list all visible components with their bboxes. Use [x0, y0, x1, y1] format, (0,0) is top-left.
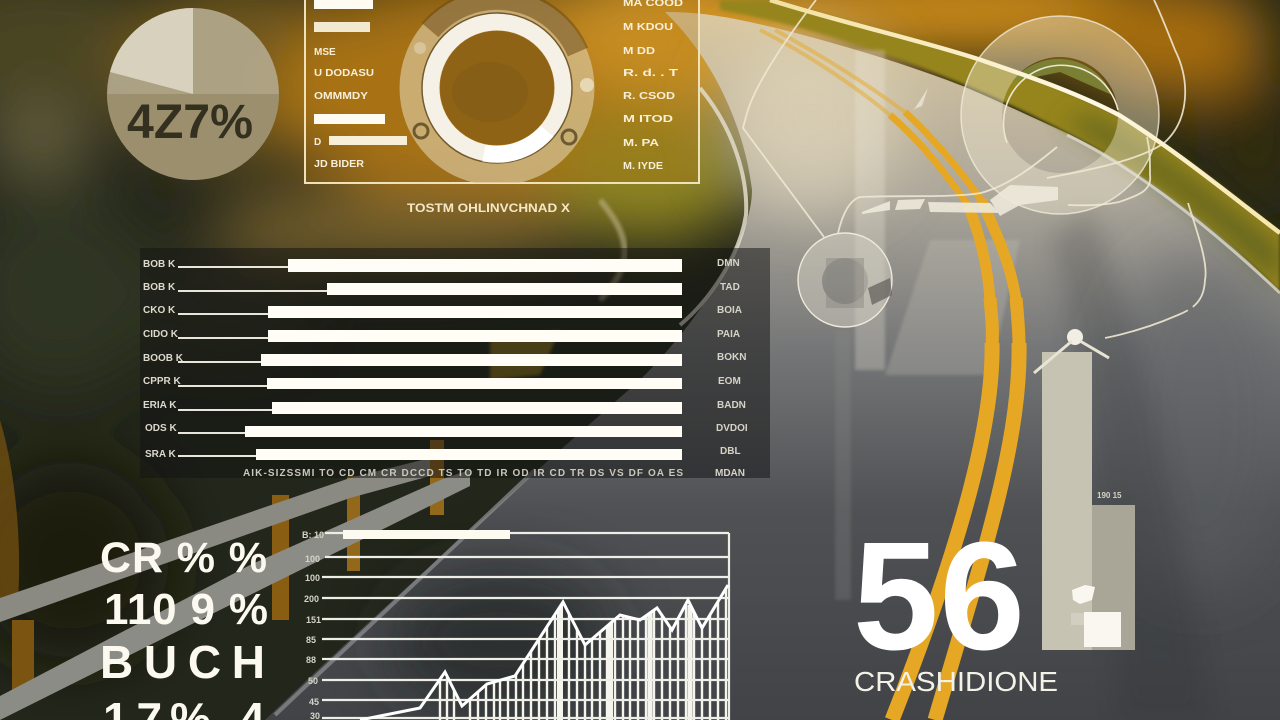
axis labels: B: 10: [302, 530, 324, 540]
arrow head: [1034, 329, 1109, 373]
axis labels: 151: [306, 615, 321, 625]
column chart with arrow: [1034, 329, 1135, 650]
right bar labels: DBL: [720, 446, 741, 457]
left labels: [314, 0, 407, 170]
stat text list: 110 9 %: [104, 585, 268, 634]
right bar labels: DVDOI: [716, 423, 748, 434]
right labels: M ITOD: [623, 114, 673, 125]
right bar labels: [715, 258, 748, 479]
road segment callout strip: [862, 185, 1058, 216]
left labels: OMMMDY: [314, 91, 368, 102]
right bar labels: DMN: [717, 258, 740, 269]
left bar labels: ODS K: [145, 423, 177, 434]
trend line: [360, 585, 728, 720]
yellow marks behind bars: [490, 330, 560, 380]
left bar labels: CIDO K: [143, 329, 179, 340]
axis labels: [302, 530, 324, 720]
radial chart caption: TOSTM OHLINVCHNAD X: [407, 201, 570, 215]
guardrail streak: [770, 0, 1280, 233]
column value: 190 15: [1097, 491, 1122, 500]
left bar labels: [143, 259, 184, 460]
stat text list: CR % %: [100, 534, 267, 582]
right bar labels: BADN: [717, 400, 746, 411]
left bar labels: ERIA K: [143, 400, 177, 411]
grassy verge on right: [720, 0, 1280, 293]
right labels: M. IYDE: [623, 161, 663, 172]
pie highlight wedge: [110, 8, 193, 94]
guardrail bottom left: [0, 420, 470, 720]
right bar labels: BOKN: [717, 352, 746, 363]
stat text list: [100, 534, 268, 720]
right labels: [623, 0, 683, 172]
right bar labels: TAD: [720, 282, 740, 293]
hatched area under line: [440, 580, 726, 720]
right bar labels: EOM: [718, 376, 741, 387]
left labels: JD BIDER: [314, 159, 365, 170]
right labels: R. CSOD: [623, 91, 675, 102]
axis labels: 45: [309, 697, 319, 707]
bar axis labels: AIK-SIZSSMI TO CD CM CR DCCD TS TO TD IR OD IR CD TR DS VS DF OA ES: [243, 468, 683, 479]
left bar labels: CPPR K: [143, 376, 182, 387]
big number caption: CRASHIDIONE: [854, 666, 1058, 697]
left bar labels: BOB K: [143, 282, 176, 293]
axis labels: 50: [308, 676, 318, 686]
right labels: M. PA: [623, 138, 659, 149]
radial chart: [412, 0, 594, 173]
axis labels: 100: [305, 554, 320, 564]
left bar labels: BOOB K: [143, 353, 184, 364]
big ring chart top right: [961, 16, 1159, 214]
small donut chart: [798, 233, 892, 327]
pie chart top left: [107, 8, 279, 180]
column icons: [1071, 585, 1121, 647]
yellow double road lines: [760, 30, 1019, 720]
right labels: R. d. . T: [623, 68, 678, 79]
chart header bar: [343, 530, 510, 539]
right bar labels: BOIA: [717, 305, 742, 316]
axis labels: 100: [305, 573, 320, 583]
left labels: U DODASU: [314, 68, 374, 79]
left labels: MSE: [314, 47, 336, 58]
right bar labels: PAIA: [717, 329, 740, 340]
right labels: M KDOU: [623, 22, 673, 33]
left bar labels: BOB K: [143, 259, 176, 270]
bars: [245, 259, 682, 460]
axis labels: 200: [304, 594, 319, 604]
grid lines: [322, 533, 729, 720]
road edges: [1067, 135, 1280, 293]
big number: 56: [853, 510, 1025, 682]
thin pale arrow marker: [912, 88, 928, 110]
right labels: M DD: [623, 46, 655, 57]
bar leader lines: [178, 267, 327, 456]
line chart: [302, 530, 729, 720]
left bar labels: CKO K: [143, 305, 176, 316]
panel: top radial chart frame: [305, 0, 699, 183]
right bar labels: MDAN: [715, 468, 745, 479]
hand-drawn overlay lines: [743, 0, 1206, 338]
stat text list: BUCH: [100, 636, 265, 688]
pale vertical light strips: [855, 50, 885, 370]
road surface drawn over scenery: [265, 12, 1280, 720]
left bar labels: SRA K: [145, 449, 177, 460]
axis labels: 85: [306, 635, 316, 645]
left labels: D: [314, 137, 321, 148]
pie value: 4Z7%: [127, 96, 253, 149]
small stream in forest: [600, 200, 625, 300]
panel: horizontal bar chart: [140, 248, 770, 479]
axis labels: 88: [306, 655, 316, 665]
